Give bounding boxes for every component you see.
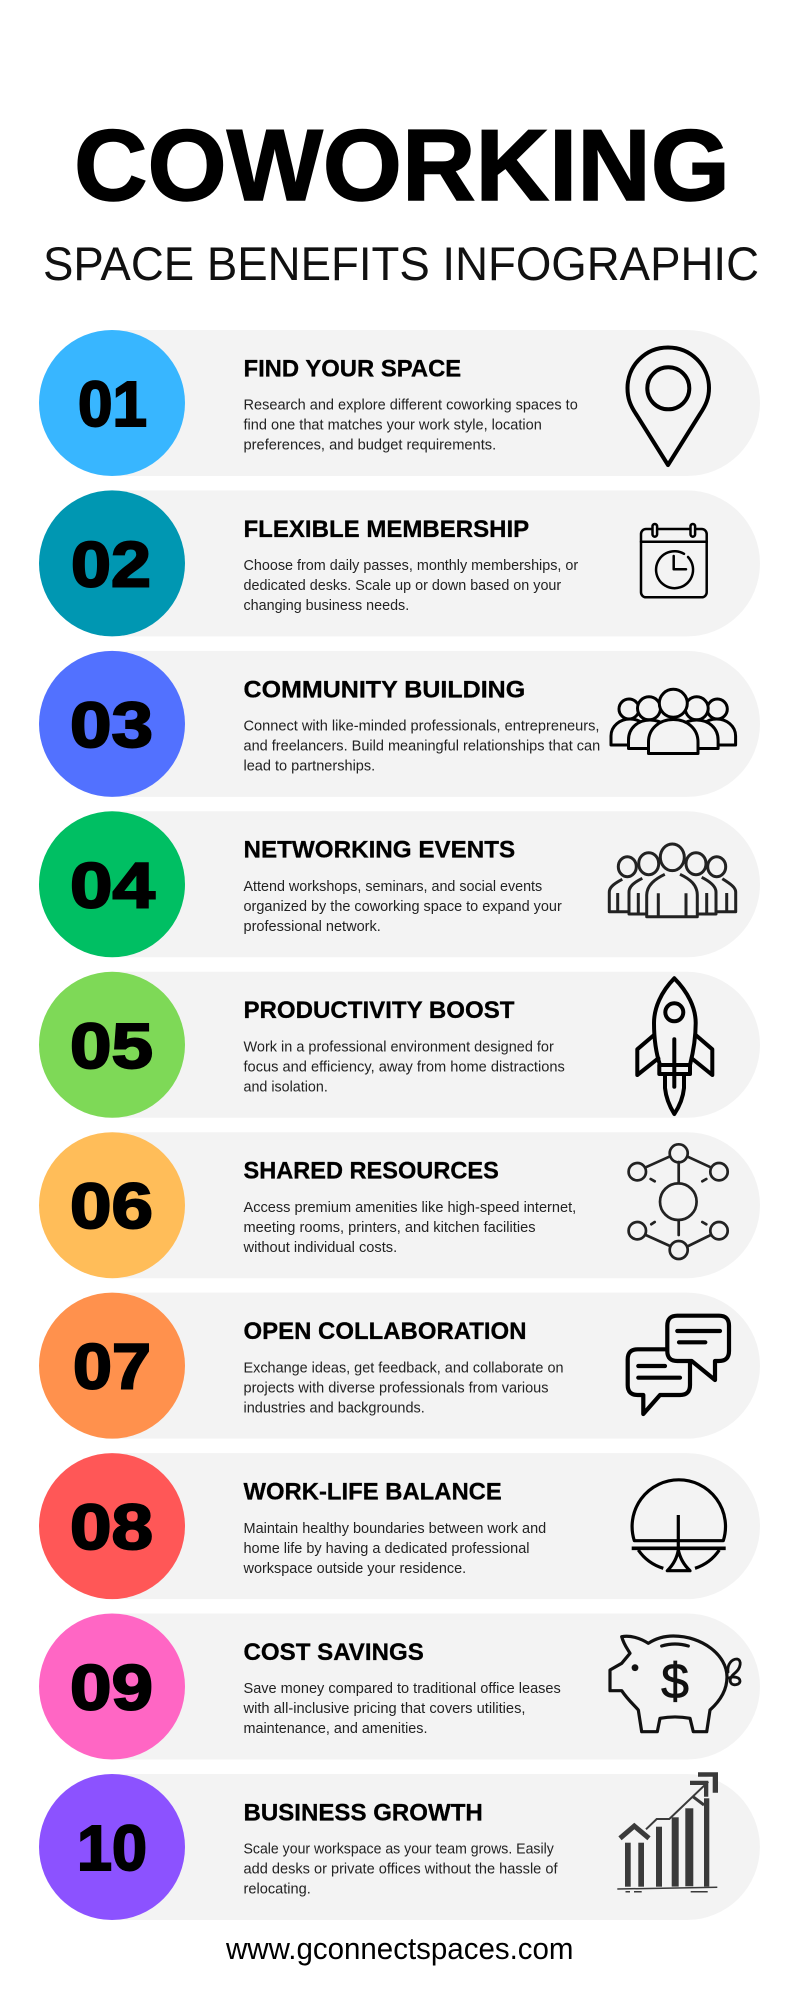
description: Access premium amenities like high-speed internet,	[244, 1199, 576, 1216]
description: preferences, and budget requirements.	[244, 437, 496, 454]
number badge 09	[39, 1614, 185, 1760]
description: and isolation.	[244, 1078, 328, 1096]
pill background	[112, 972, 760, 1118]
number badge 01: 01	[78, 368, 147, 440]
heading: FLEXIBLE MEMBERSHIP	[244, 516, 529, 543]
heading: SHARED RESOURCES	[244, 1158, 499, 1185]
number badge 03: 03	[70, 689, 153, 761]
description	[244, 1359, 564, 1416]
heading: COST SAVINGS	[244, 1639, 424, 1666]
description: with all-inclusive pricing that covers utilities,	[243, 1700, 526, 1717]
panel: 10 business growth	[39, 1772, 760, 1920]
description: find one that matches your work style, location	[244, 417, 542, 434]
description	[244, 878, 562, 935]
panel: 07 open collaboration	[39, 1293, 760, 1439]
number badge 02	[39, 490, 185, 636]
description	[243, 1520, 546, 1577]
icon: balance scale	[632, 1480, 726, 1571]
pill background	[112, 811, 760, 957]
icon: rocket	[637, 978, 712, 1114]
panel: 05 productivity boost	[39, 972, 760, 1118]
icon: location pin	[628, 348, 709, 465]
description: home life by having a dedicated professional	[244, 1540, 530, 1557]
number badge 10	[39, 1774, 185, 1920]
pill background	[112, 1774, 760, 1920]
description: and freelancers. Build meaningful relationships that can	[244, 738, 600, 755]
pill background	[112, 490, 760, 636]
number badge 05: 05	[70, 1010, 153, 1082]
description: Exchange ideas, get feedback, and collaborate on	[244, 1359, 564, 1376]
icon: resource network	[629, 1144, 728, 1259]
description: without individual costs.	[243, 1239, 397, 1256]
description	[244, 1038, 565, 1096]
icon: networking people	[609, 844, 736, 917]
description: changing business needs.	[244, 597, 409, 614]
icon: chat bubbles	[628, 1316, 729, 1414]
heading: WORK-LIFE BALANCE	[244, 1478, 502, 1506]
panel: 03 community building	[39, 651, 760, 797]
description: workspace outside your residence.	[243, 1560, 466, 1577]
number badge 06	[39, 1132, 185, 1278]
number badge 10: 10	[77, 1812, 147, 1884]
title: COWORKING	[74, 110, 730, 222]
number badge 05	[39, 972, 185, 1118]
heading: COMMUNITY BUILDING	[244, 676, 525, 703]
description: professional network.	[244, 918, 381, 935]
description	[243, 1680, 561, 1737]
number badge 04	[39, 811, 185, 957]
description: dedicated desks. Scale up or down based on your	[244, 577, 561, 594]
heading: PRODUCTIVITY BOOST	[244, 997, 515, 1024]
description	[244, 718, 600, 775]
number badge 02: 02	[71, 528, 151, 600]
pill background	[112, 651, 760, 797]
icon: growth chart	[617, 1772, 718, 1892]
icon: piggy bank	[610, 1636, 740, 1732]
number badge 04: 04	[70, 849, 155, 921]
description: Maintain healthy boundaries between work and	[244, 1520, 546, 1537]
number badge 01	[39, 330, 185, 476]
panel: 01 find your space	[39, 330, 760, 476]
heading: BUSINESS GROWTH	[244, 1799, 483, 1826]
description	[244, 1841, 558, 1898]
footer website: www.gconnectspaces.com	[225, 1931, 574, 1966]
description: meeting rooms, printers, and kitchen facilities	[244, 1219, 536, 1236]
description: lead to partnerships.	[244, 758, 375, 775]
icon: calendar clock	[641, 524, 707, 597]
description: organized by the coworking space to expand your	[244, 898, 562, 915]
description	[244, 397, 578, 454]
pill background	[112, 1293, 760, 1439]
number badge 07: 07	[73, 1331, 151, 1403]
description: Attend workshops, seminars, and social events	[244, 878, 542, 895]
number badge 08	[39, 1453, 185, 1599]
icon: piggy bank: $	[661, 1653, 689, 1709]
number badge 07	[39, 1293, 185, 1439]
number badge 03	[39, 651, 185, 797]
description: focus and efficiency, away from home distractions	[244, 1058, 565, 1076]
description	[244, 557, 578, 614]
panel: 02 flexible membership	[39, 490, 760, 636]
description: Work in a professional environment designed for	[244, 1038, 554, 1056]
description: add desks or private offices without the hassle of	[244, 1861, 558, 1878]
description	[243, 1199, 576, 1256]
heading: OPEN COLLABORATION	[244, 1318, 526, 1345]
description: Save money compared to traditional office leases	[244, 1680, 561, 1697]
description: Research and explore different coworking spaces to	[244, 397, 578, 414]
description: Connect with like-minded professionals, entrepreneurs,	[244, 718, 600, 735]
subtitle: SPACE BENEFITS INFOGRAPHIC	[43, 237, 759, 290]
description: relocating.	[244, 1881, 311, 1898]
description: Choose from daily passes, monthly memberships, or	[244, 557, 578, 574]
pill background	[112, 1132, 760, 1278]
pill background	[112, 1453, 760, 1599]
pill background	[112, 1614, 760, 1760]
panel: 06 shared resources	[39, 1132, 760, 1278]
number badge 06: 06	[70, 1170, 153, 1242]
number badge 09: 09	[70, 1652, 153, 1724]
panel: 09 cost savings	[39, 1614, 760, 1760]
description: projects with diverse professionals from various	[244, 1379, 548, 1396]
panel: 04 networking events	[39, 811, 760, 957]
pill background	[112, 330, 760, 476]
panel: 08 work-life balance	[39, 1453, 760, 1599]
description: industries and backgrounds.	[244, 1399, 425, 1416]
description: Scale your workspace as your team grows. Easily	[244, 1841, 554, 1858]
number badge 08: 08	[70, 1491, 153, 1563]
description: maintenance, and amenities.	[244, 1720, 428, 1737]
heading: NETWORKING EVENTS	[244, 837, 515, 864]
heading: FIND YOUR SPACE	[244, 355, 461, 382]
icon: community group	[611, 689, 736, 754]
